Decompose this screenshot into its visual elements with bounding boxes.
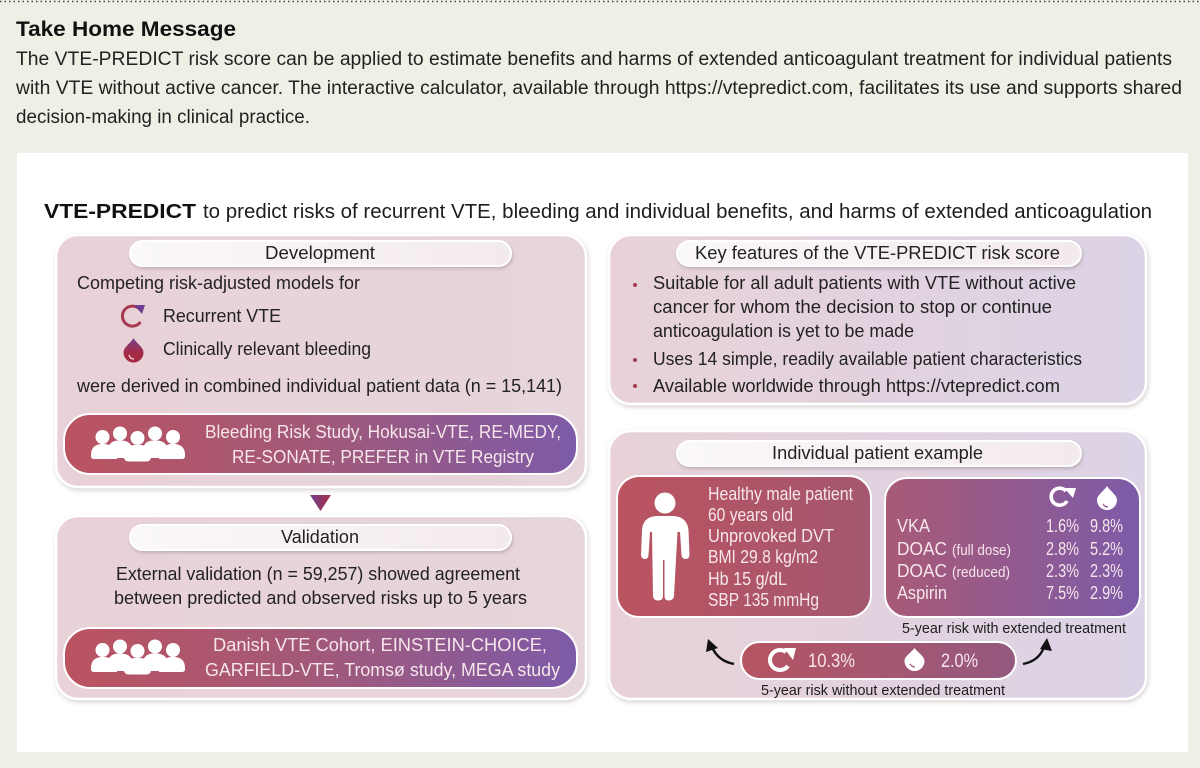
development cohort names [205,422,561,467]
treatment labels: VKA [897,516,930,536]
dotted top rule [0,0,1200,2]
key features heading pill: Key features of the VTE-PREDICT risk score [695,243,1060,263]
icon: blood drop [1097,486,1117,510]
individual patient heading pill: Individual patient example [772,443,983,463]
development derivation text: were derived in combined individual patient data (n = 15,141) [76,376,562,396]
value: bleeding risk: 2.0% [941,651,978,672]
risk values: 7.5% [1046,583,1079,603]
validation cohort names: Danish VTE Cohort, EINSTEIN-CHOICE, [213,635,547,655]
figure title: to predict risks of recurrent VTE, bleeding and individual benefits, and harms of extended anticoagulation [203,201,1152,223]
bullet list: anticoagulation is yet to be made [653,321,914,341]
icon: patient group [91,426,185,462]
arrow: to patient card [706,639,734,664]
risk values: 5.2% [1090,539,1123,559]
individual patient heading pill [677,441,1081,466]
text block: take home message body: The VTE-PREDICT risk score can be applied to estimate benefits and harms of extended anticoagulant treatment for individual patients [16,49,1172,70]
icon: blood drop [904,648,924,671]
white figure panel [17,153,1188,752]
panel: development [56,235,586,487]
validation text: between predicted and observed risks up to 5 years [114,588,527,608]
patient characteristics [708,484,853,610]
patient characteristics: Unprovoked DVT [708,526,834,546]
bullet list: Suitable for all adult patients with VTE without active [653,273,1076,293]
risk values: 1.6% [1046,516,1079,536]
caption: without extended treatment: 5-year risk without extended treatment [761,682,1006,699]
validation cohorts band [64,628,577,688]
validation text: External validation (n = 59,257) showed agreement [116,564,520,584]
text block: take home message body [15,49,1182,128]
bullet list: cancer for whom the decision to stop or continue [653,297,1052,317]
treatment labels [897,516,1011,603]
bullet list [633,273,1082,396]
patient characteristics: SBP 135 mmHg [708,590,819,610]
patient characteristics: BMI 29.8 kg/m2 [708,547,818,567]
validation cohort names [205,635,560,680]
validation cohort names: GARFIELD-VTE, Tromsø study, MEGA study [205,660,560,680]
treatment labels: (reduced) [952,564,1010,581]
icon: patient group [91,640,185,674]
heading: Take Home Message: Take Home Message [16,18,236,41]
patient characteristics: 60 years old [708,505,793,525]
validation heading pill [130,525,511,550]
panel: key features [609,235,1146,404]
icon: recurrent arrow [122,305,145,326]
figure title: VTE-PREDICT [44,201,196,223]
development cohort names: RE-SONATE, PREFER in VTE Registry [232,447,534,467]
bullet list: Available worldwide through https://vtepredict.com [653,376,1060,396]
risk table card [885,478,1140,617]
risk values: 2.3% [1090,561,1123,581]
value: recurrent risk: 10.3% [808,651,855,672]
patient characteristics: Healthy male patient [708,484,853,504]
bullet list: Uses 14 simple, readily available patient characteristics [653,349,1082,369]
development intro text: Competing risk-adjusted models for [77,273,360,293]
development heading pill [130,241,511,266]
text block: take home message body: with VTE without active cancer. The interactive calculator, available through https://vtepredict.com, facilitates its use and supports shared [15,78,1182,99]
validation text [114,564,527,608]
arrow: development to validation [310,495,331,511]
development cohort names: Bleeding Risk Study, Hokusai-VTE, RE-MEDY, [205,422,561,442]
treatment labels: Aspirin [897,583,947,603]
label: recurrent VTE: Recurrent VTE [163,306,281,326]
panel: individual patient example [609,431,1146,699]
validation heading pill: Validation [281,527,359,547]
caption: with extended treatment: 5-year risk with extended treatment [902,620,1127,637]
text block: take home message body: decision-making in clinical practice. [16,107,310,128]
risk values: 2.8% [1046,539,1079,559]
treatment labels: DOAC [897,539,947,559]
risk values: 2.3% [1046,561,1079,581]
development cohorts band [64,414,577,474]
risk values [1046,516,1123,603]
patient card [617,476,871,617]
treatment labels: (full dose) [952,542,1011,559]
patient characteristics: Hb 15 g/dL [708,569,787,589]
arrow: to risk table [1023,638,1052,664]
icon: person [641,492,690,600]
risk values: 9.8% [1090,516,1123,536]
development heading pill: Development [265,243,375,263]
icon: blood drop [124,338,144,362]
label: clinically relevant bleeding: Clinically relevant bleeding [163,339,371,359]
baseline risk pill [741,642,1016,679]
risk values: 2.9% [1090,583,1123,603]
treatment labels: DOAC [897,561,947,581]
icon: recurrent arrow [770,648,796,670]
icon: recurrent arrow [1051,488,1076,505]
panel: validation [56,516,586,699]
